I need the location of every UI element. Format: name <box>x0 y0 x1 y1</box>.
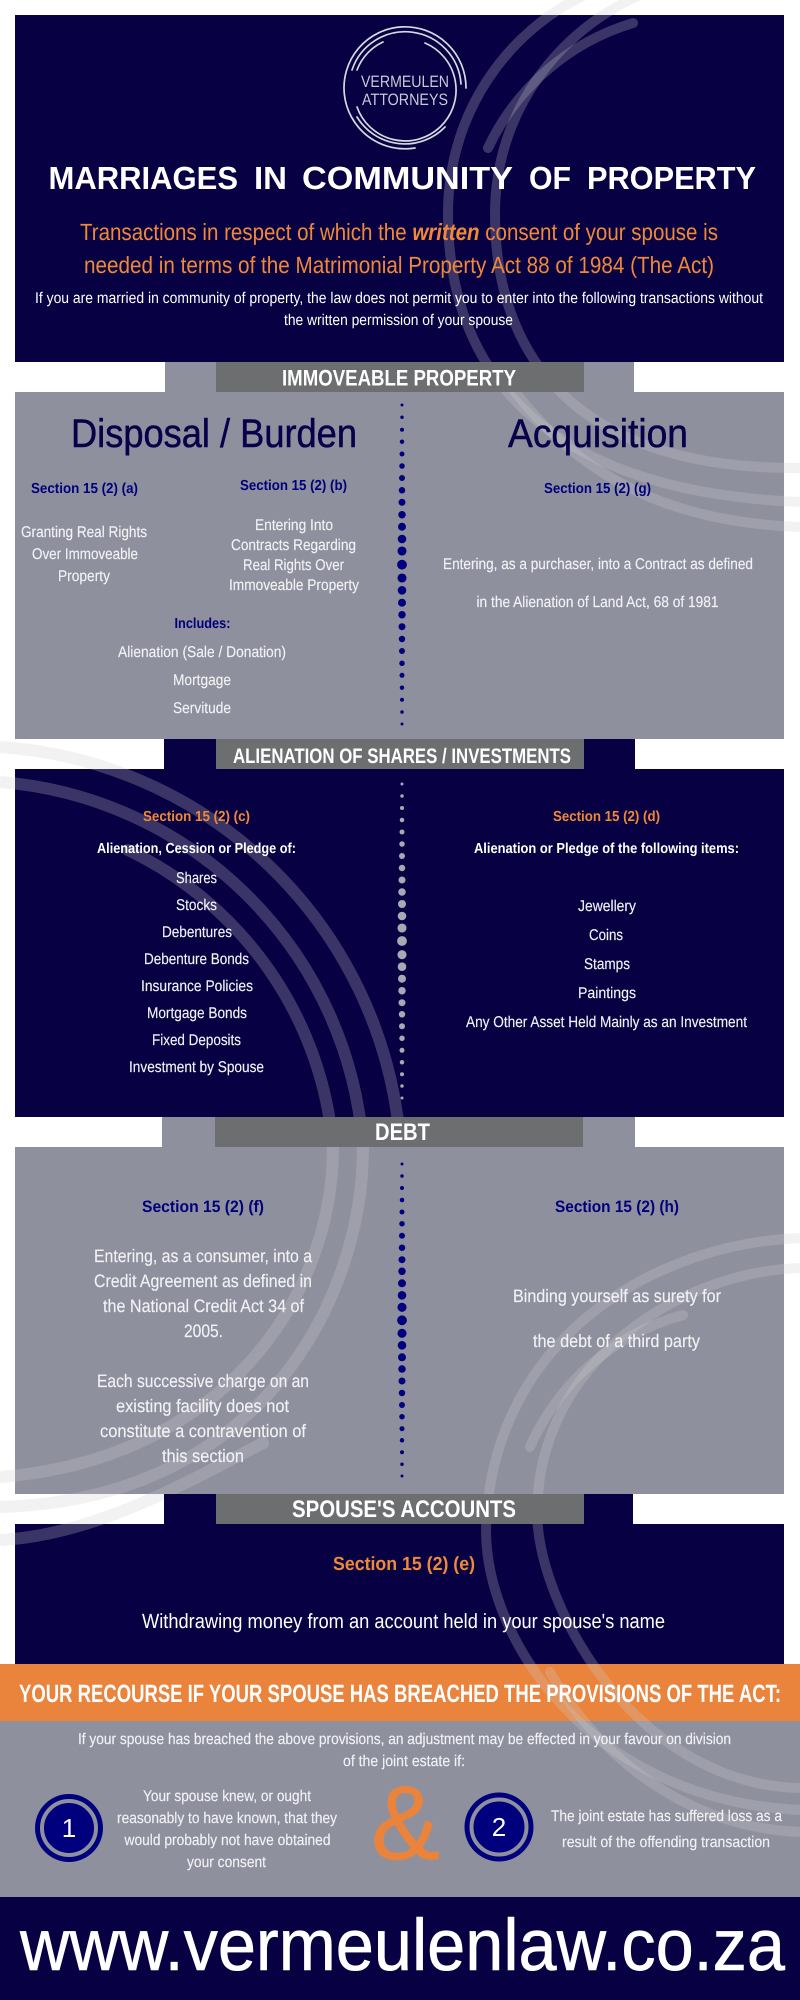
title: COMMUNITY <box>302 160 513 196</box>
block: section 15 (2) (f): Section 15 (2) (f) <box>142 1198 264 1216</box>
icon: number 1 badge <box>35 1794 103 1862</box>
panel: debt background <box>15 1147 784 1494</box>
text: condition one: reasonably to have known, that they <box>117 1810 337 1827</box>
text: recourse introduction <box>78 1731 731 1770</box>
heading: Disposal / Burden: Disposal / Burden <box>71 412 357 456</box>
block: section 15 (2) (d): Stamps <box>584 956 630 973</box>
text: condition one: your consent <box>187 1854 267 1871</box>
block: section 15 (2) (b): Immoveable Property <box>229 577 359 594</box>
block: section 15 (2) (h) <box>513 1198 721 1351</box>
block: section 15 (2) (c): Debentures <box>162 924 232 941</box>
block: section 15 (2) (d): Coins <box>589 927 623 944</box>
block: section 15 (2) (d) <box>466 809 748 1031</box>
logo: Vermeulen Attorneys: ATTORNEYS <box>362 91 448 109</box>
block: section 15 (2) (a) <box>21 481 147 585</box>
block: section 15 (2) (c): Section 15 (2) (c) <box>143 809 250 825</box>
block: section 15 (2) (c): Stocks <box>176 897 217 914</box>
block: section 15 (2) (g) <box>443 481 753 611</box>
block: section 15 (2) (d): Jewellery <box>578 898 636 915</box>
block: section 15 (2) (b): Real Rights Over <box>243 557 344 574</box>
block: section 15 (2) (g): in the Alienation of Land Act, 68 of 1981 <box>476 594 718 611</box>
tab: spouse's accounts: SPOUSE'S ACCOUNTS <box>292 1496 516 1523</box>
panel: alienation of shares background <box>15 769 784 1117</box>
block: section 15 (2) (b) <box>229 478 359 594</box>
block: section 15 (2) (c): Investment by Spouse <box>129 1059 264 1076</box>
block: includes list: Servitude <box>173 700 231 717</box>
tab: debt: DEBT <box>375 1119 430 1146</box>
block: section 15 (2) (g): Section 15 (2) (g) <box>544 481 651 497</box>
block: section 15 (2) (f): constitute a contravention of <box>100 1421 307 1441</box>
block: section 15 (2) (e) <box>142 1554 665 1633</box>
block: section 15 (2) (b): Contracts Regarding <box>231 537 356 554</box>
title: IN <box>254 160 287 196</box>
block: section 15 (2) (c): Mortgage Bonds <box>147 1005 247 1022</box>
footer cover <box>0 1897 800 2000</box>
block: section 15 (2) (c): Debenture Bonds <box>144 951 249 968</box>
block: section 15 (2) (b): Entering Into <box>255 517 333 534</box>
block: section 15 (2) (d): Any Other Asset Held Mainly as an Investment <box>466 1014 748 1031</box>
block: section 15 (2) (a): Section 15 (2) (a) <box>31 481 138 497</box>
block: section 15 (2) (f) <box>94 1198 313 1466</box>
block: includes list: Alienation (Sale / Donation) <box>118 644 286 661</box>
intro text: the written permission of your spouse <box>284 312 513 329</box>
block: section 15 (2) (e): Section 15 (2) (e) <box>333 1554 475 1575</box>
panel: header background <box>15 15 784 362</box>
panel: footer background <box>0 1897 800 2000</box>
icon: ampersand: & <box>371 1765 440 1882</box>
block: includes list: Mortgage <box>173 672 231 689</box>
block: section 15 (2) (f): this section <box>162 1446 244 1466</box>
title: MARRIAGES <box>48 160 238 196</box>
block: section 15 (2) (c): Shares <box>176 870 217 887</box>
block: section 15 (2) (c): Alienation, Cession or Pledge of: <box>97 841 296 857</box>
block: section 15 (2) (f): 2005. <box>184 1321 223 1341</box>
title <box>48 160 756 196</box>
tab: immoveable property <box>165 362 634 392</box>
text: condition two <box>551 1808 782 1851</box>
subtitle in orange: needed in terms of the Matrimonial Property Act 88 of 1984 (The Act) <box>84 252 714 278</box>
block: section 15 (2) (d): Paintings <box>578 985 636 1002</box>
block: section 15 (2) (f): existing facility does not <box>116 1396 289 1416</box>
icon: number 2 badge: 2 <box>492 1812 506 1842</box>
block: section 15 (2) (a): Over Immoveable <box>32 546 138 563</box>
subtitle in orange: Transactions in respect of which the written consent of your spouse is <box>80 219 718 245</box>
block: section 15 (2) (f): Credit Agreement as defined in <box>94 1271 312 1291</box>
dotted divider: debt <box>397 1162 407 1478</box>
block: section 15 (2) (e): Withdrawing money from an account held in your spouse's name <box>142 1610 665 1633</box>
tab: alienation of shares / investments <box>164 739 635 769</box>
block: includes list <box>118 616 286 717</box>
block: section 15 (2) (d): Section 15 (2) (d) <box>553 809 660 825</box>
text: condition one: would probably not have obtained <box>124 1832 330 1849</box>
text: condition one <box>117 1788 337 1871</box>
icon: number 2 badge <box>464 1792 534 1862</box>
tab: spouse's accounts <box>164 1494 633 1524</box>
block: section 15 (2) (c): Fixed Deposits <box>152 1032 241 1049</box>
intro text <box>35 290 764 329</box>
block: section 15 (2) (g): Entering, as a purchaser, into a Contract as defined <box>443 556 753 573</box>
block: section 15 (2) (f): Entering, as a consumer, into a <box>94 1246 313 1266</box>
dotted divider: immoveable property <box>397 404 407 726</box>
dotted divider: shares and investments <box>397 782 407 1100</box>
panel: immoveable property background <box>15 392 784 739</box>
block: section 15 (2) (h): Section 15 (2) (h) <box>555 1198 679 1216</box>
block: section 15 (2) (h): Binding yourself as surety for <box>513 1286 721 1306</box>
block: section 15 (2) (h): the debt of a third party <box>533 1331 700 1351</box>
tab: alienation of shares / investments: ALIENATION OF SHARES / INVESTMENTS <box>233 745 571 768</box>
subtitle in orange <box>80 219 718 278</box>
panel: spouse's accounts background <box>15 1524 784 1664</box>
block: section 15 (2) (b): Section 15 (2) (b) <box>240 478 347 494</box>
text: recourse introduction: If your spouse has breached the above provisions, an adjustment may be effected in your favour on division <box>78 1731 731 1748</box>
title: OF <box>529 160 571 196</box>
text: condition two: result of the offending transaction <box>562 1834 770 1851</box>
block: section 15 (2) (f): the National Credit Act 34 of <box>103 1296 305 1316</box>
block: section 15 (2) (d): Alienation or Pledge of the following items: <box>474 841 739 857</box>
block: section 15 (2) (f): Each successive charge on an <box>97 1371 309 1391</box>
icon: number 1 badge: 1 <box>62 1813 76 1843</box>
panel: recourse orange banner background <box>0 1664 800 1721</box>
text: recourse introduction: of the joint estate if: <box>343 1753 465 1770</box>
block: includes list: Includes: <box>174 616 230 632</box>
logo: Vermeulen Attorneys: VERMEULEN <box>361 73 449 91</box>
block: section 15 (2) (a): Granting Real Rights <box>21 524 147 541</box>
heading: Acquisition: Acquisition <box>508 412 688 456</box>
block: section 15 (2) (c): Insurance Policies <box>141 978 253 995</box>
block: section 15 (2) (c) <box>97 809 296 1076</box>
block: section 15 (2) (a): Property <box>58 568 110 585</box>
text: condition one: Your spouse knew, or ought <box>143 1788 312 1805</box>
title: PROPERTY <box>587 160 756 196</box>
panel: recourse details background <box>0 1721 800 1897</box>
tab: debt <box>162 1117 635 1147</box>
logo: Vermeulen Attorneys <box>344 27 466 149</box>
tab: immoveable property: IMMOVEABLE PROPERTY <box>282 366 516 390</box>
